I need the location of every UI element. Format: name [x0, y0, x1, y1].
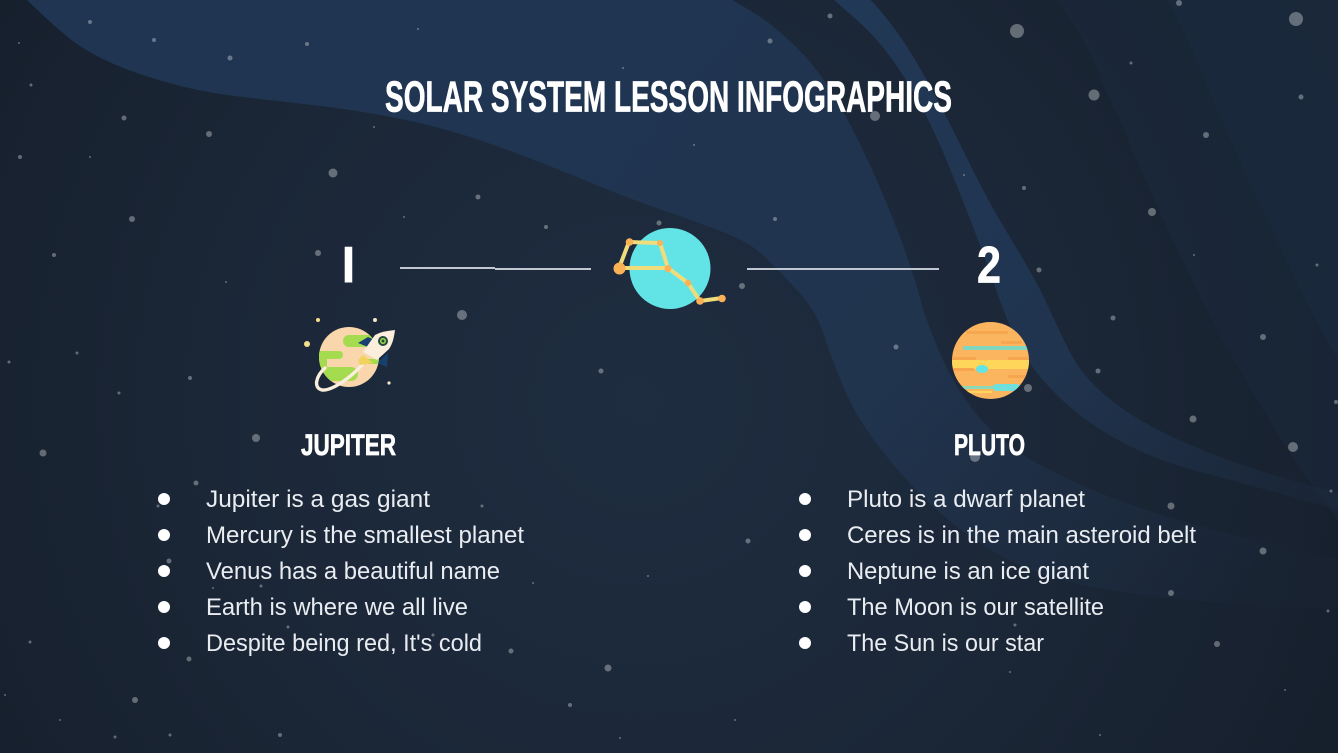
heading: Jupiter: JUPITER: [301, 429, 396, 462]
bullet list: Jupiter: Earth is where we all live: [206, 594, 468, 621]
background: faint right waves: [1056, 0, 1338, 520]
number 2: 2: [977, 236, 1001, 294]
bullet list: Pluto: The Sun is our star: [847, 630, 1044, 657]
bullet list: Jupiter: Venus has a beautiful name: [206, 558, 500, 585]
bullet list: Jupiter: Mercury is the smallest planet: [206, 522, 524, 549]
bullet list: Pluto: Neptune is an ice giant: [847, 558, 1089, 585]
background: second nebula wave: [834, 0, 1338, 510]
bullet list: Pluto: Pluto is a dwarf planet: [847, 486, 1085, 513]
bullet list: Jupiter: [158, 486, 524, 657]
connector line right: [747, 268, 939, 270]
connector line left: [400, 268, 591, 269]
bullet list: Pluto: Ceres is in the main asteroid belt: [847, 522, 1196, 549]
bullet list: Pluto: [799, 486, 1196, 657]
icon: planet with rocket: [304, 318, 395, 390]
icon: constellation planet: [614, 228, 726, 309]
heading: Pluto: PLUTO: [954, 429, 1025, 462]
icon: banded planet: [952, 322, 1032, 399]
bullet list: Jupiter: Jupiter is a gas giant: [206, 486, 430, 513]
number 1: I: [341, 236, 356, 294]
title: SOLAR SYSTEM LESSON INFOGRAPHICS: [385, 72, 952, 122]
background: main nebula wave: [27, 0, 1338, 610]
bullet list: Pluto: The Moon is our satellite: [847, 594, 1104, 621]
bullet list: Jupiter: Despite being red, It's cold: [206, 630, 482, 657]
